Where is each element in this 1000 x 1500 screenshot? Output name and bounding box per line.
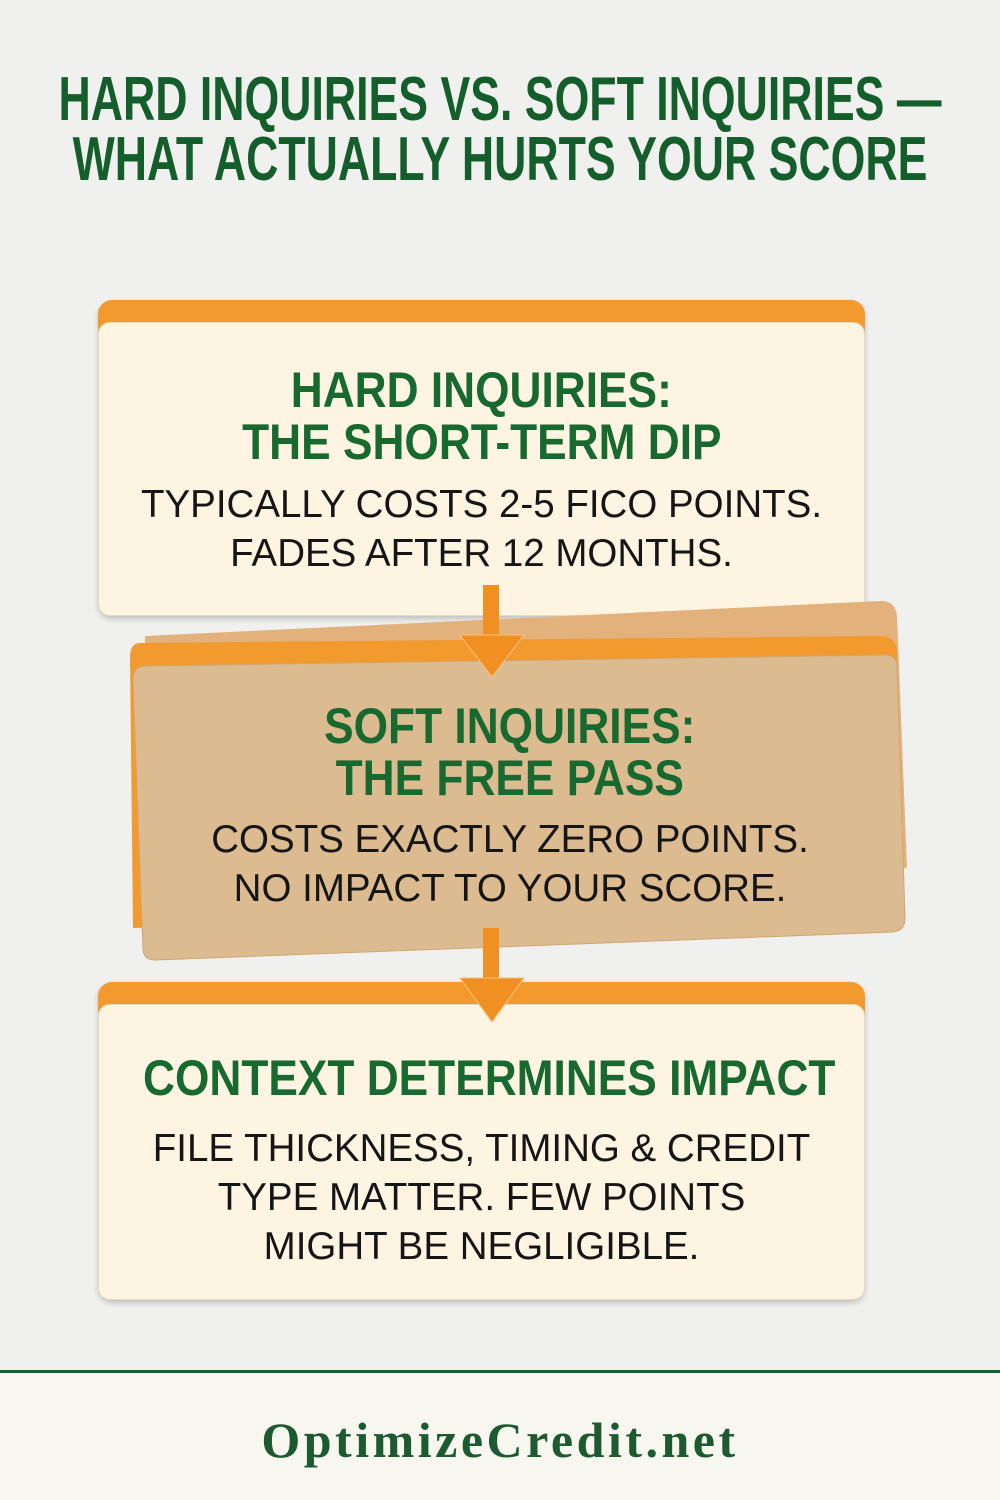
footer: [0, 1370, 1000, 1500]
text: soft inquiries body: COSTS EXACTLY ZERO POINTS.: [211, 818, 809, 861]
text: soft inquiries body: [211, 818, 809, 910]
footer text: OptimizeCredit.net: [261, 1412, 739, 1468]
heading: hard inquiries: [242, 362, 721, 470]
text: context body: [153, 1127, 810, 1268]
heading: soft inquiries: SOFT INQUIRIES:: [324, 698, 696, 754]
panel: hard inquiries: [98, 300, 865, 616]
text: hard inquiries body: TYPICALLY COSTS 2-5 FICO POINTS.: [141, 483, 822, 526]
text: hard inquiries body: FADES AFTER 12 MONTHS.: [230, 532, 733, 575]
text: context body: FILE THICKNESS, TIMING & CREDIT: [153, 1127, 810, 1170]
title: WHAT ACTUALLY HURTS YOUR SCORE: [73, 125, 927, 194]
panel: context determines impact: [98, 982, 865, 1300]
arrow: hard to soft: [459, 585, 525, 678]
text: hard inquiries body: [141, 483, 822, 575]
panel: soft inquiries: [130, 601, 907, 960]
text: context body: MIGHT BE NEGLIGIBLE.: [264, 1225, 699, 1268]
text: context body: TYPE MATTER. FEW POINTS: [218, 1176, 745, 1219]
heading: soft inquiries: THE FREE PASS: [336, 750, 684, 806]
heading: hard inquiries: HARD INQUIRIES:: [291, 362, 672, 418]
arrow: soft to context: [459, 928, 525, 1023]
text: soft inquiries body: NO IMPACT TO YOUR SCORE.: [234, 867, 786, 910]
heading: context: CONTEXT DETERMINES IMPACT: [143, 1050, 835, 1106]
heading: soft inquiries: [324, 698, 696, 806]
title: HARD INQUIRIES VS. SOFT INQUIRIES —: [59, 65, 941, 134]
title: [59, 65, 942, 194]
heading: hard inquiries: THE SHORT-TERM DIP: [242, 414, 721, 470]
